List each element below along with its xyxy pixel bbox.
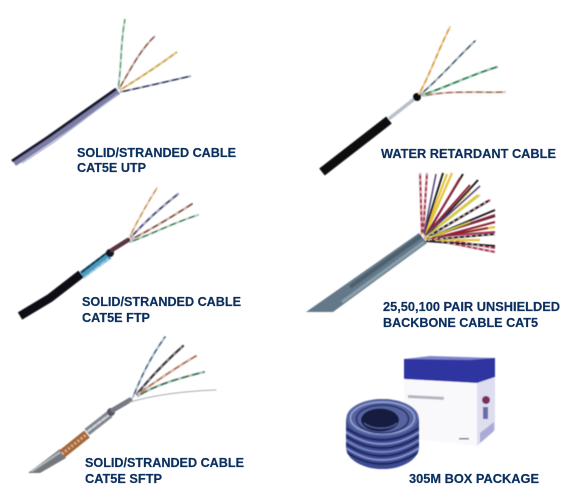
label: CAT5E SFTP: CAT5E SFTP [85,472,162,486]
label: CAT5E UTP: SOLID/STRANDED CABLE [77,146,236,160]
label: CAT5E FTP [82,295,241,325]
label: CAT5E SFTP [85,456,244,486]
label: backbone cable: 25,50,100 PAIR UNSHIELDED [383,300,560,314]
label: CAT5E FTP: SOLID/STRANDED CABLE [82,295,241,309]
cable: CAT5E FTP [20,188,198,316]
label: backbone cable: BACKBONE CABLE CAT5 [383,316,538,330]
label: CAT5E SFTP: SOLID/STRANDED CABLE [85,456,244,470]
label: CAT5E FTP: CAT5E FTP [82,311,150,325]
icon: cable coil [346,399,419,469]
cable: backbone bundle [306,173,495,312]
cable: water retardant [322,27,505,172]
label: CAT5E UTP [77,146,236,175]
icon: cable box [404,356,495,446]
label: water retardant cable: WATER RETARDANT CABLE [381,147,556,161]
cable: CAT5E SFTP [28,337,216,473]
label: backbone cable [383,300,560,330]
label: CAT5E UTP: CAT5E UTP [77,161,146,175]
label: 305m box package: 305M BOX PACKAGE [409,472,539,486]
cable: CAT5E UTP [12,19,191,163]
